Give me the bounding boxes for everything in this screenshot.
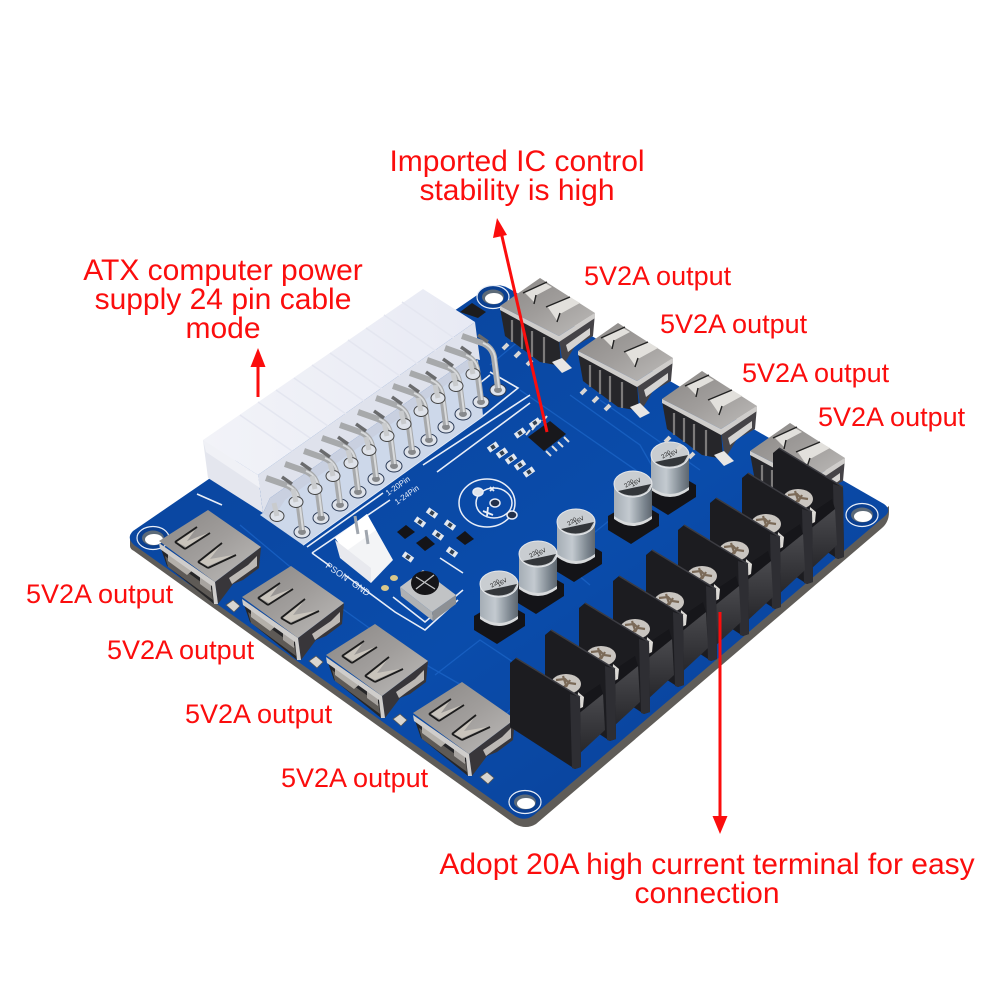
white JST connector — [324, 514, 393, 598]
front output labels — [26, 579, 429, 793]
transistors — [397, 525, 474, 551]
infrared receiver — [381, 570, 456, 621]
front output labels: 5V2A output — [185, 699, 333, 729]
24 pin ATX connector — [203, 289, 486, 520]
arrow to ATX connector — [250, 348, 266, 397]
silk outlines — [197, 372, 530, 630]
rear USB outputs — [500, 278, 845, 518]
front output labels: 5V2A output — [26, 579, 174, 609]
arrow to terminal — [712, 612, 728, 834]
label: terminal: connection — [634, 877, 780, 910]
high current terminal block — [510, 448, 844, 769]
rear output labels: 5V2A output — [660, 309, 808, 339]
front USB outputs — [159, 510, 515, 784]
title: imported IC control: Imported IC control — [389, 145, 645, 178]
white JST connector: PSON — [324, 560, 350, 583]
label: terminal: Adopt 20A high current terminal for easy — [439, 848, 975, 881]
front output labels: 5V2A output — [107, 635, 255, 665]
label: ATX power cable: mode — [185, 312, 261, 345]
rear output labels: 5V2A output — [818, 402, 966, 432]
rear output labels — [584, 261, 966, 432]
circuit board — [130, 278, 889, 827]
silk polarity circle — [459, 479, 517, 527]
pin silk area — [260, 360, 483, 545]
arrow to IC — [493, 218, 547, 432]
pin range labels: 1-24Pin — [393, 483, 421, 507]
pin range labels — [384, 474, 421, 507]
front output labels: 5V2A output — [281, 763, 429, 793]
label: ATX power cable: supply 24 pin cable — [95, 283, 351, 316]
rear output labels: 5V2A output — [742, 358, 890, 388]
board traces — [240, 340, 700, 720]
pin range labels: 1-20Pin — [384, 474, 412, 498]
white JST connector: GND — [350, 578, 372, 598]
label: ATX power cable: ATX computer power — [83, 254, 363, 287]
board surface — [130, 285, 888, 819]
small resistors row — [402, 417, 541, 563]
connector pins — [266, 335, 506, 538]
board edge — [130, 506, 889, 827]
mounting holes — [137, 286, 878, 814]
rear output labels: 5V2A output — [584, 261, 732, 291]
control chip — [526, 416, 569, 456]
electrolytic capacitors — [474, 442, 696, 644]
title: imported IC control: stability is high — [419, 174, 615, 207]
